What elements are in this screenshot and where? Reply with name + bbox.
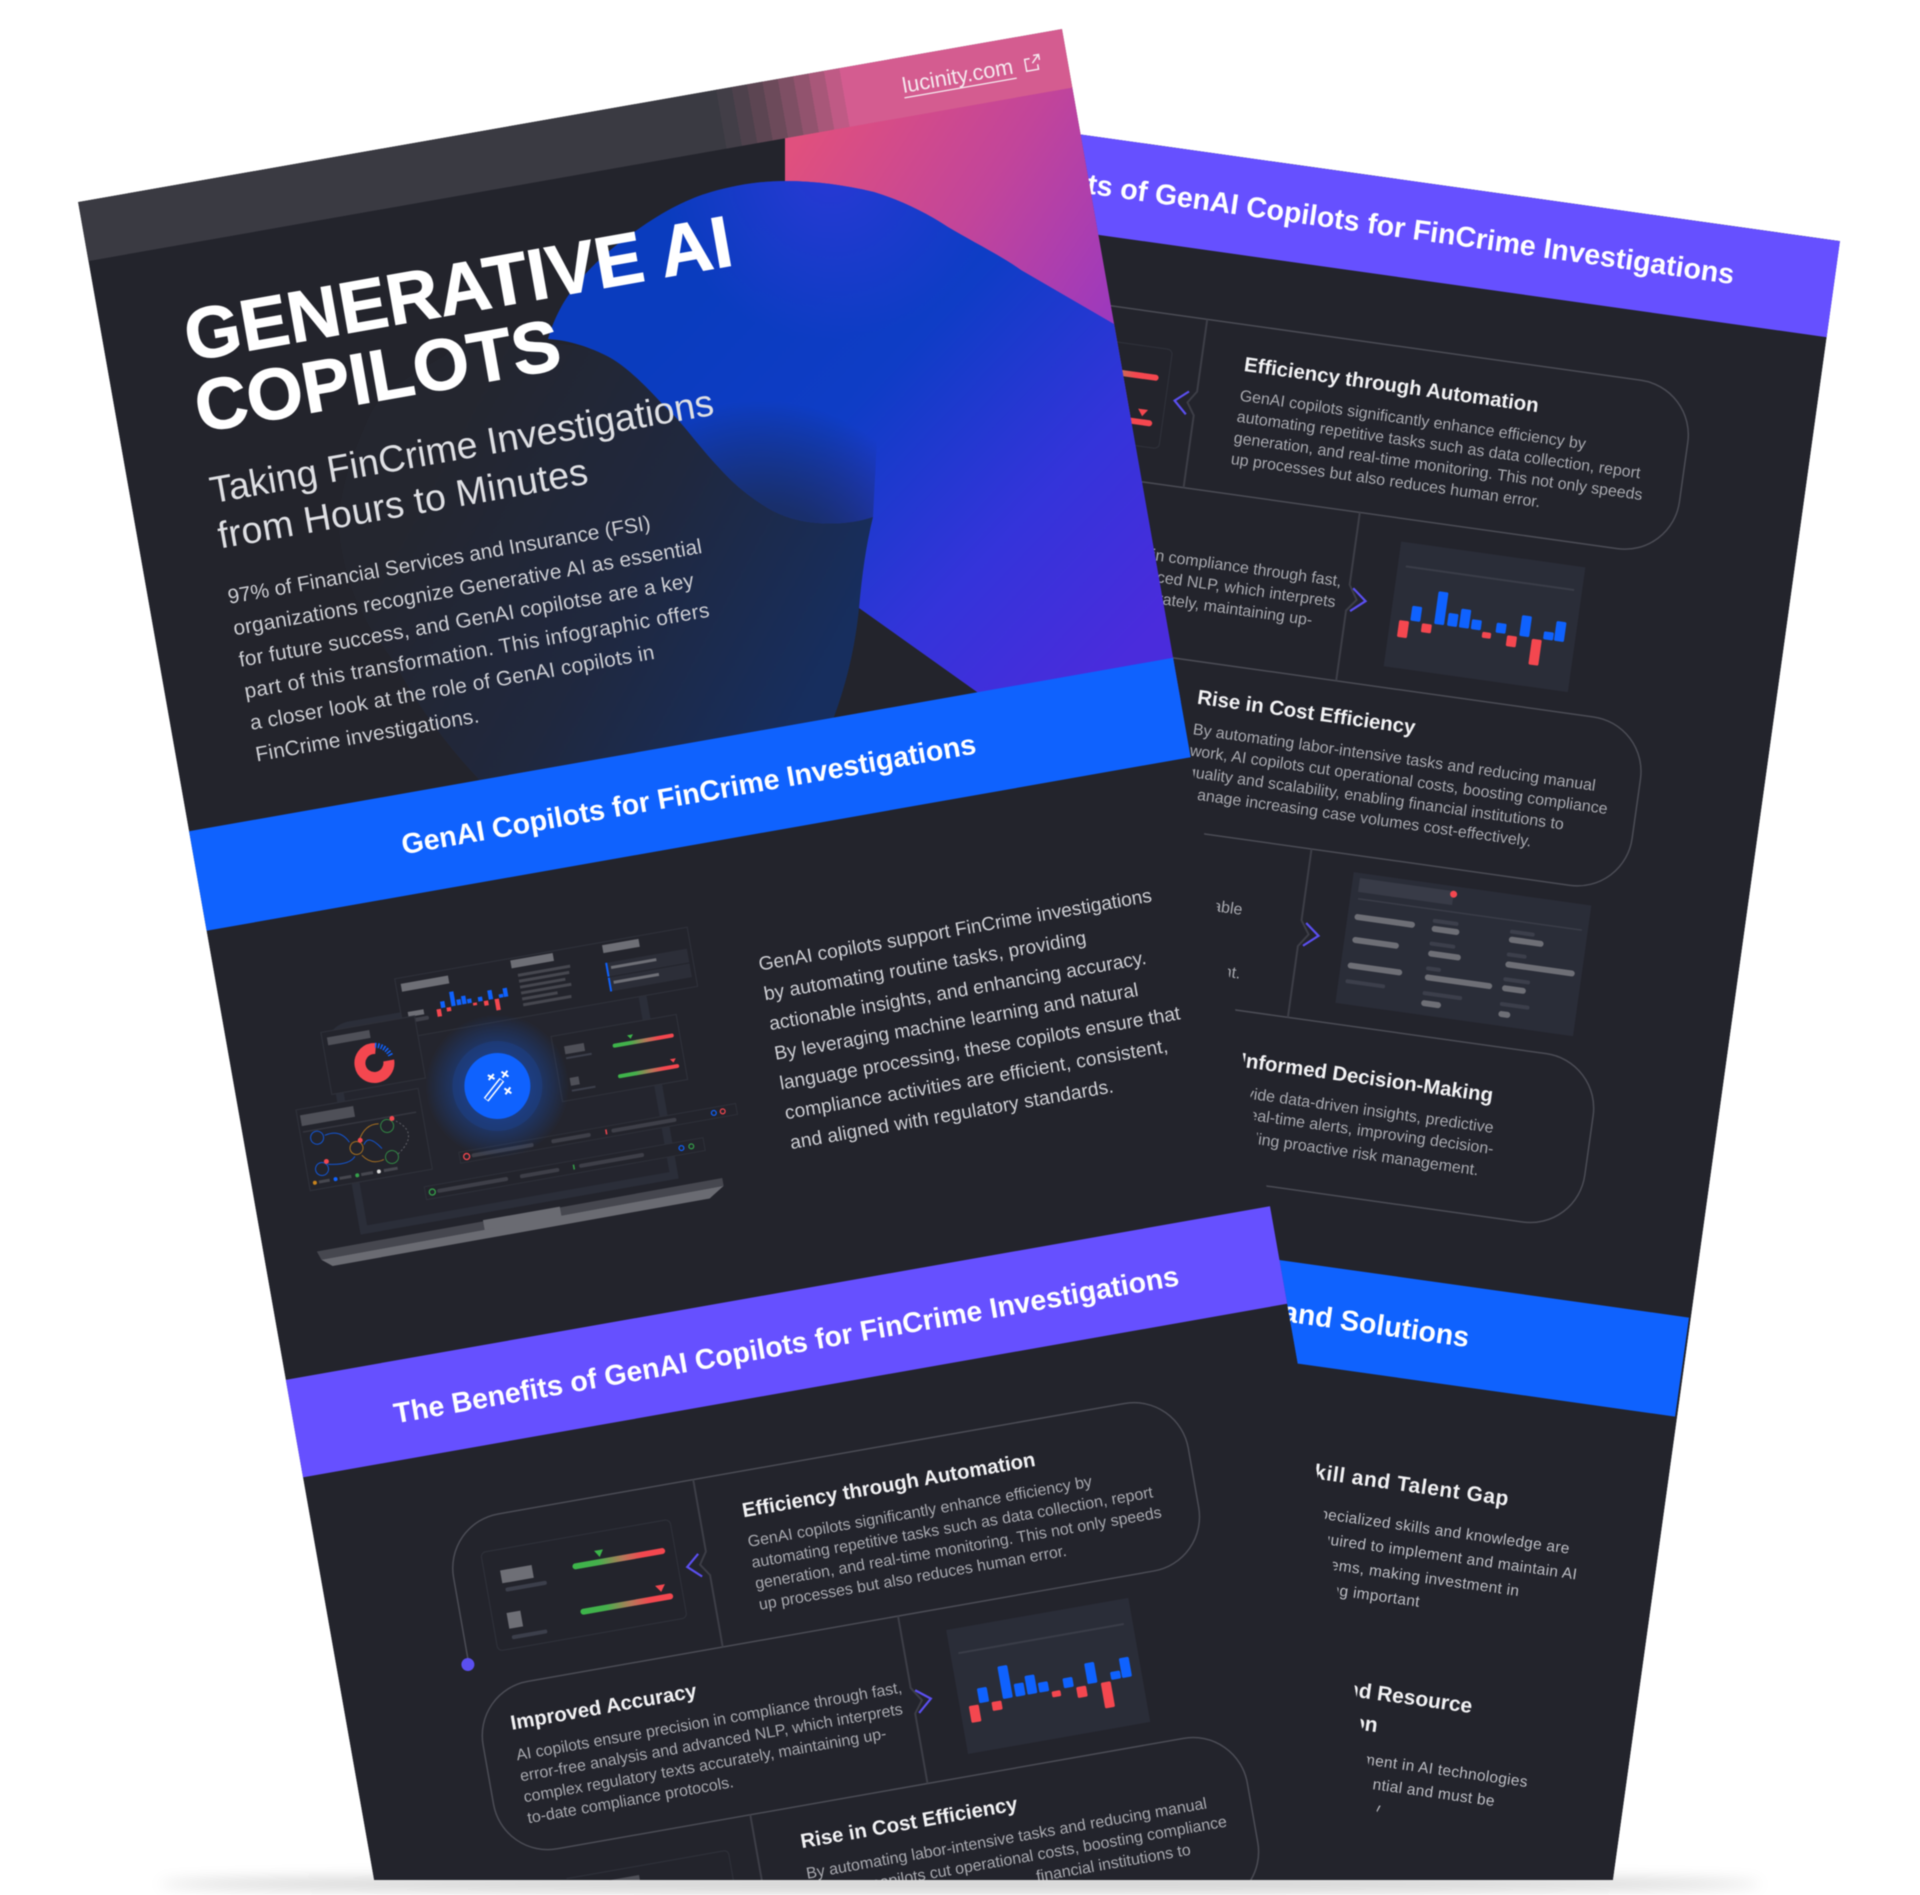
gauges panel xyxy=(564,1014,688,1092)
bright blue blob xyxy=(548,181,1220,710)
laptop dashboard illustration xyxy=(273,924,751,1268)
top header strip xyxy=(78,28,1073,261)
timeline dot xyxy=(460,1657,475,1672)
back page card dividers xyxy=(1182,320,1361,1016)
subtitle: Taking FinCrime Investigations xyxy=(206,381,717,511)
back page card 2 text: AI copilots ensure precision in compliance through fast, xyxy=(953,519,1342,590)
back page card 1 text: automating repetitive tasks such as data collection, report xyxy=(1236,409,1642,482)
back page card 1 text: up processes but also reduces human error. xyxy=(1230,451,1541,511)
section 1 paragraph: language processing, these copilots ensure that xyxy=(778,1003,1183,1095)
card 3 text: By automating labor-intensive tasks and reducing manual xyxy=(805,1795,1208,1883)
card 2 bar chart xyxy=(946,1598,1150,1754)
back page card 1 text: generation, and real-time monitoring. This not only speeds xyxy=(1233,430,1643,504)
front page xyxy=(78,28,1389,1895)
back page challenges banner: Implementation Challenges and Solutions xyxy=(905,1243,1471,1354)
card 2 text: complex regulatory texts accurately, maintaining up- xyxy=(522,1726,888,1806)
card 2 text: error-free analysis and advanced NLP, which interprets xyxy=(519,1701,904,1785)
card 1 text: generation, and real-time monitoring. This not only speeds xyxy=(754,1504,1163,1593)
back page card 2 text: error-free analysis and advanced NLP, which interprets xyxy=(950,540,1337,611)
back page cost and resource text: managed carefully xyxy=(1249,1783,1382,1818)
back page card 5 text: Data-Informed Decision-Making xyxy=(1188,1043,1494,1107)
card 1 text: GenAI copilots significantly enhance efficiency by xyxy=(746,1474,1093,1551)
list row 1 xyxy=(459,1104,737,1163)
back page card 3 text: manage increasing case volumes cost-effectively. xyxy=(1183,785,1532,851)
dashboard top panel xyxy=(394,927,698,1022)
back page card outlines xyxy=(1110,304,1690,1224)
card 3 text xyxy=(799,1758,1232,1895)
section banner: GenAI copilots xyxy=(189,658,1191,931)
intro paragraph: for future success, and GenAI copilotse are a key xyxy=(237,569,696,672)
back page card 1 text xyxy=(1231,356,1642,508)
back page challenges banner xyxy=(1278,1259,1690,1418)
card 2 text: Improved Accuracy xyxy=(509,1680,699,1735)
card 2 text: to-date compliance protocols. xyxy=(526,1774,735,1827)
back page cost and resource text: Initial investment in AI technologies xyxy=(1277,1739,1529,1791)
donut panel xyxy=(321,1016,425,1094)
network panel xyxy=(296,1102,416,1191)
card 2 text: AI copilots ensure precision in compliance through fast, xyxy=(515,1680,903,1764)
back page cost and resource text: Allocation xyxy=(1276,1700,1379,1737)
intro paragraph: FinCrime investigations. xyxy=(254,704,481,766)
back page benefits banner xyxy=(1080,134,1840,338)
back page card 2 text: to-date compliance protocols. xyxy=(944,582,1153,628)
back page card 1 text: GenAI copilots significantly enhance efficiency by xyxy=(1239,388,1587,453)
card 1 text: up processes but also reduces human error. xyxy=(758,1543,1068,1614)
back page card 2 text: complex regulatory texts accurately, maintaining up- xyxy=(947,561,1313,629)
section 1 paragraph: GenAI copilots support FinCrime investigations xyxy=(757,886,1154,976)
back page card 2 bar chart xyxy=(1384,541,1585,692)
back page card 5 text: AI copilots provide data-driven insights, predictive xyxy=(1144,1071,1495,1137)
back page card 5 text: analytics and real-time alerts, improving decision- xyxy=(1145,1093,1495,1158)
section 1 paragraph: By leveraging machine learning and natural xyxy=(773,980,1140,1065)
card 3 text: financial institutions to xyxy=(1035,1842,1192,1886)
section 1 paragraph: by automating routine tasks, providing xyxy=(762,928,1088,1005)
back page card 5 text: making and enabling proactive risk management. xyxy=(1132,1114,1480,1179)
card outlines xyxy=(444,1394,1264,1895)
section banner: benefits xyxy=(286,1206,1288,1477)
intro paragraph: a closer look at the role of GenAI copilots in xyxy=(248,641,656,735)
top header strip: lucinity.com xyxy=(900,54,1015,98)
intro paragraph: organizations recognize Generative AI as essential xyxy=(232,535,704,640)
back page cost and resource text: Cost and Resource xyxy=(1281,1669,1474,1718)
back page card 3 text xyxy=(1190,689,1608,850)
back page card 3 text: quality and scalability, enabling financial institutions to xyxy=(1186,764,1565,834)
back page card 4 text xyxy=(1216,900,1242,979)
copilot magic wand badge xyxy=(430,1018,565,1154)
back page card 4 table panel xyxy=(1335,872,1591,1036)
list row 2 xyxy=(424,1138,705,1200)
section 1 paragraph: and aligned with regulatory standards. xyxy=(789,1076,1115,1154)
section banner: benefits: The Benefits of GenAI Copilots for FinCrime Investigations xyxy=(391,1260,1181,1430)
back page skill and talent gap text: Skill and Talent Gap xyxy=(1298,1459,1511,1511)
back page card 1 text: Efficiency through Automation xyxy=(1243,354,1540,417)
card 2 text xyxy=(509,1645,914,1827)
section 1 paragraph: actionable insights, and enhancing accuracy. xyxy=(768,948,1148,1035)
section 1 paragraph: compliance activities are efficient, consistent, xyxy=(783,1036,1170,1124)
back page chevrons xyxy=(1172,390,1368,948)
back page skill and talent gap text: required to implement and maintain AI xyxy=(1306,1529,1578,1583)
section banner: GenAI copilots: GenAI Copilots for FinCrime Investigations xyxy=(399,729,978,861)
card 3 text: copilots cut operational costs, boosting compliance xyxy=(871,1814,1228,1893)
back page card 5 text xyxy=(1242,1052,1494,1176)
back page card 2 text xyxy=(1153,548,1340,628)
back page benefits banner: The Benefits of GenAI Copilots for FinCrime Investigations xyxy=(940,148,1736,291)
back page skill and talent gap text: systems, making investment in xyxy=(1300,1553,1520,1600)
subtitle: from Hours to Minutes xyxy=(214,450,591,556)
laptop screen frame xyxy=(328,974,674,1230)
card 3 text: Rise in Cost Efficiency xyxy=(799,1793,1020,1853)
card 1 text: automating repetitive tasks such as data collection, report xyxy=(750,1484,1155,1572)
card 1 text: Efficiency through Automation xyxy=(741,1449,1037,1522)
card 1 gauges xyxy=(481,1519,687,1651)
pink gradient background xyxy=(785,87,1140,420)
laptop base xyxy=(317,1178,726,1268)
back page card 4 text: AI copilots are highly scalable and adaptable xyxy=(928,858,1244,919)
card 3 panel xyxy=(567,1850,734,1895)
dim navy blob xyxy=(409,350,873,780)
back page cost and resource text xyxy=(1354,1682,1528,1812)
chevrons xyxy=(685,1518,933,1748)
back page card 4 text: without additional headcount. xyxy=(1033,937,1242,983)
back page: benefits and challenges xyxy=(1080,134,1841,1881)
icon: external link xyxy=(1024,54,1041,71)
card 1 text xyxy=(741,1429,1167,1614)
back page card 2 text: Improved Accuracy xyxy=(957,485,1147,533)
back page card 4 text: Scalability and Flexibility xyxy=(910,820,1153,876)
title: GENERATIVE AI xyxy=(178,202,738,377)
ground shadow xyxy=(160,1875,1760,1893)
card dividers xyxy=(685,1447,948,1882)
back page card 3 text: work, AI copilots cut operational costs, boosting compliance xyxy=(1188,742,1609,818)
back page skill and talent gap text: Specialized skills and knowledge are xyxy=(1308,1504,1571,1558)
back page skill and talent gap text xyxy=(1316,1462,1577,1608)
title: COPILOTS xyxy=(189,305,567,448)
back page skill and talent gap text: training important xyxy=(1295,1577,1421,1611)
back page card 3 text: Rise in Cost Efficiency xyxy=(1196,687,1417,739)
intro paragraph: part of this transformation. This infographic offers xyxy=(243,599,711,703)
back page cost and resource text: is substantial and must be xyxy=(1308,1767,1496,1810)
back page card 1 gauges xyxy=(1118,342,1172,448)
back page card 3 text: By automating labor-intensive tasks and reducing manual xyxy=(1192,721,1597,795)
intro paragraph: 97% of Financial Services and Insurance (FSI) xyxy=(226,512,652,609)
